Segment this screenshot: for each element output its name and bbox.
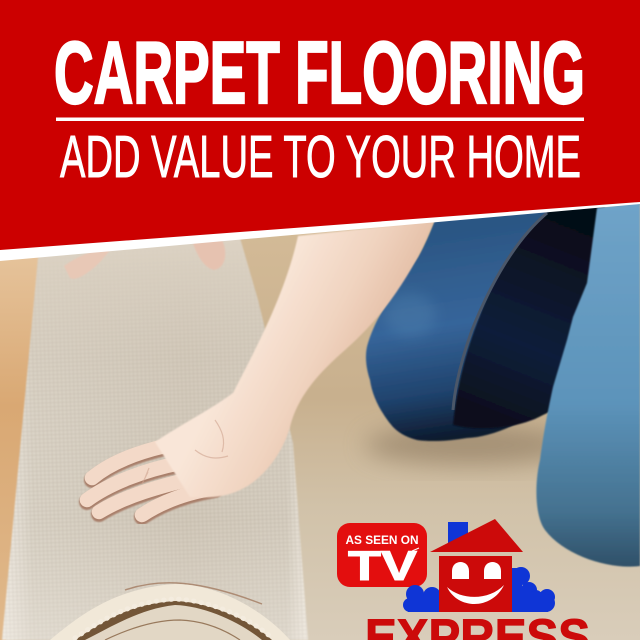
jeans: shin [536,202,640,567]
white band under red banner [0,195,640,261]
right window [484,562,501,579]
house body [439,556,512,612]
far hand fingers at top of roll [64,240,225,279]
jeans: thigh and knee [366,205,600,441]
arm and hand [87,221,434,517]
badge: as seen on TV: AS SEEN ON [346,535,418,547]
logo: Express house [365,519,590,640]
badge: as seen on TV [337,523,427,589]
seam on jeans [453,213,547,410]
carpeted floor [0,200,640,640]
roof [430,519,523,552]
photo: carpet being rolled out [0,200,640,640]
soft carpet shadow beside knee [365,425,575,465]
knee highlight [384,293,436,337]
chimney [448,522,468,546]
knuckle details [142,420,228,484]
left bush [403,585,441,612]
dark fold between legs [453,205,605,428]
title divider [56,118,584,121]
roll end with tufted pile [50,583,290,640]
arm and back of hand [155,221,434,497]
finger shadows [87,448,215,517]
wooden floor at left [0,250,42,640]
smile [447,585,504,604]
badge: as seen on TV: TV [348,542,417,589]
carpet roll [2,238,308,640]
red banner [0,0,640,250]
right bush [512,567,555,612]
fingers [87,446,215,515]
left window [452,562,469,579]
